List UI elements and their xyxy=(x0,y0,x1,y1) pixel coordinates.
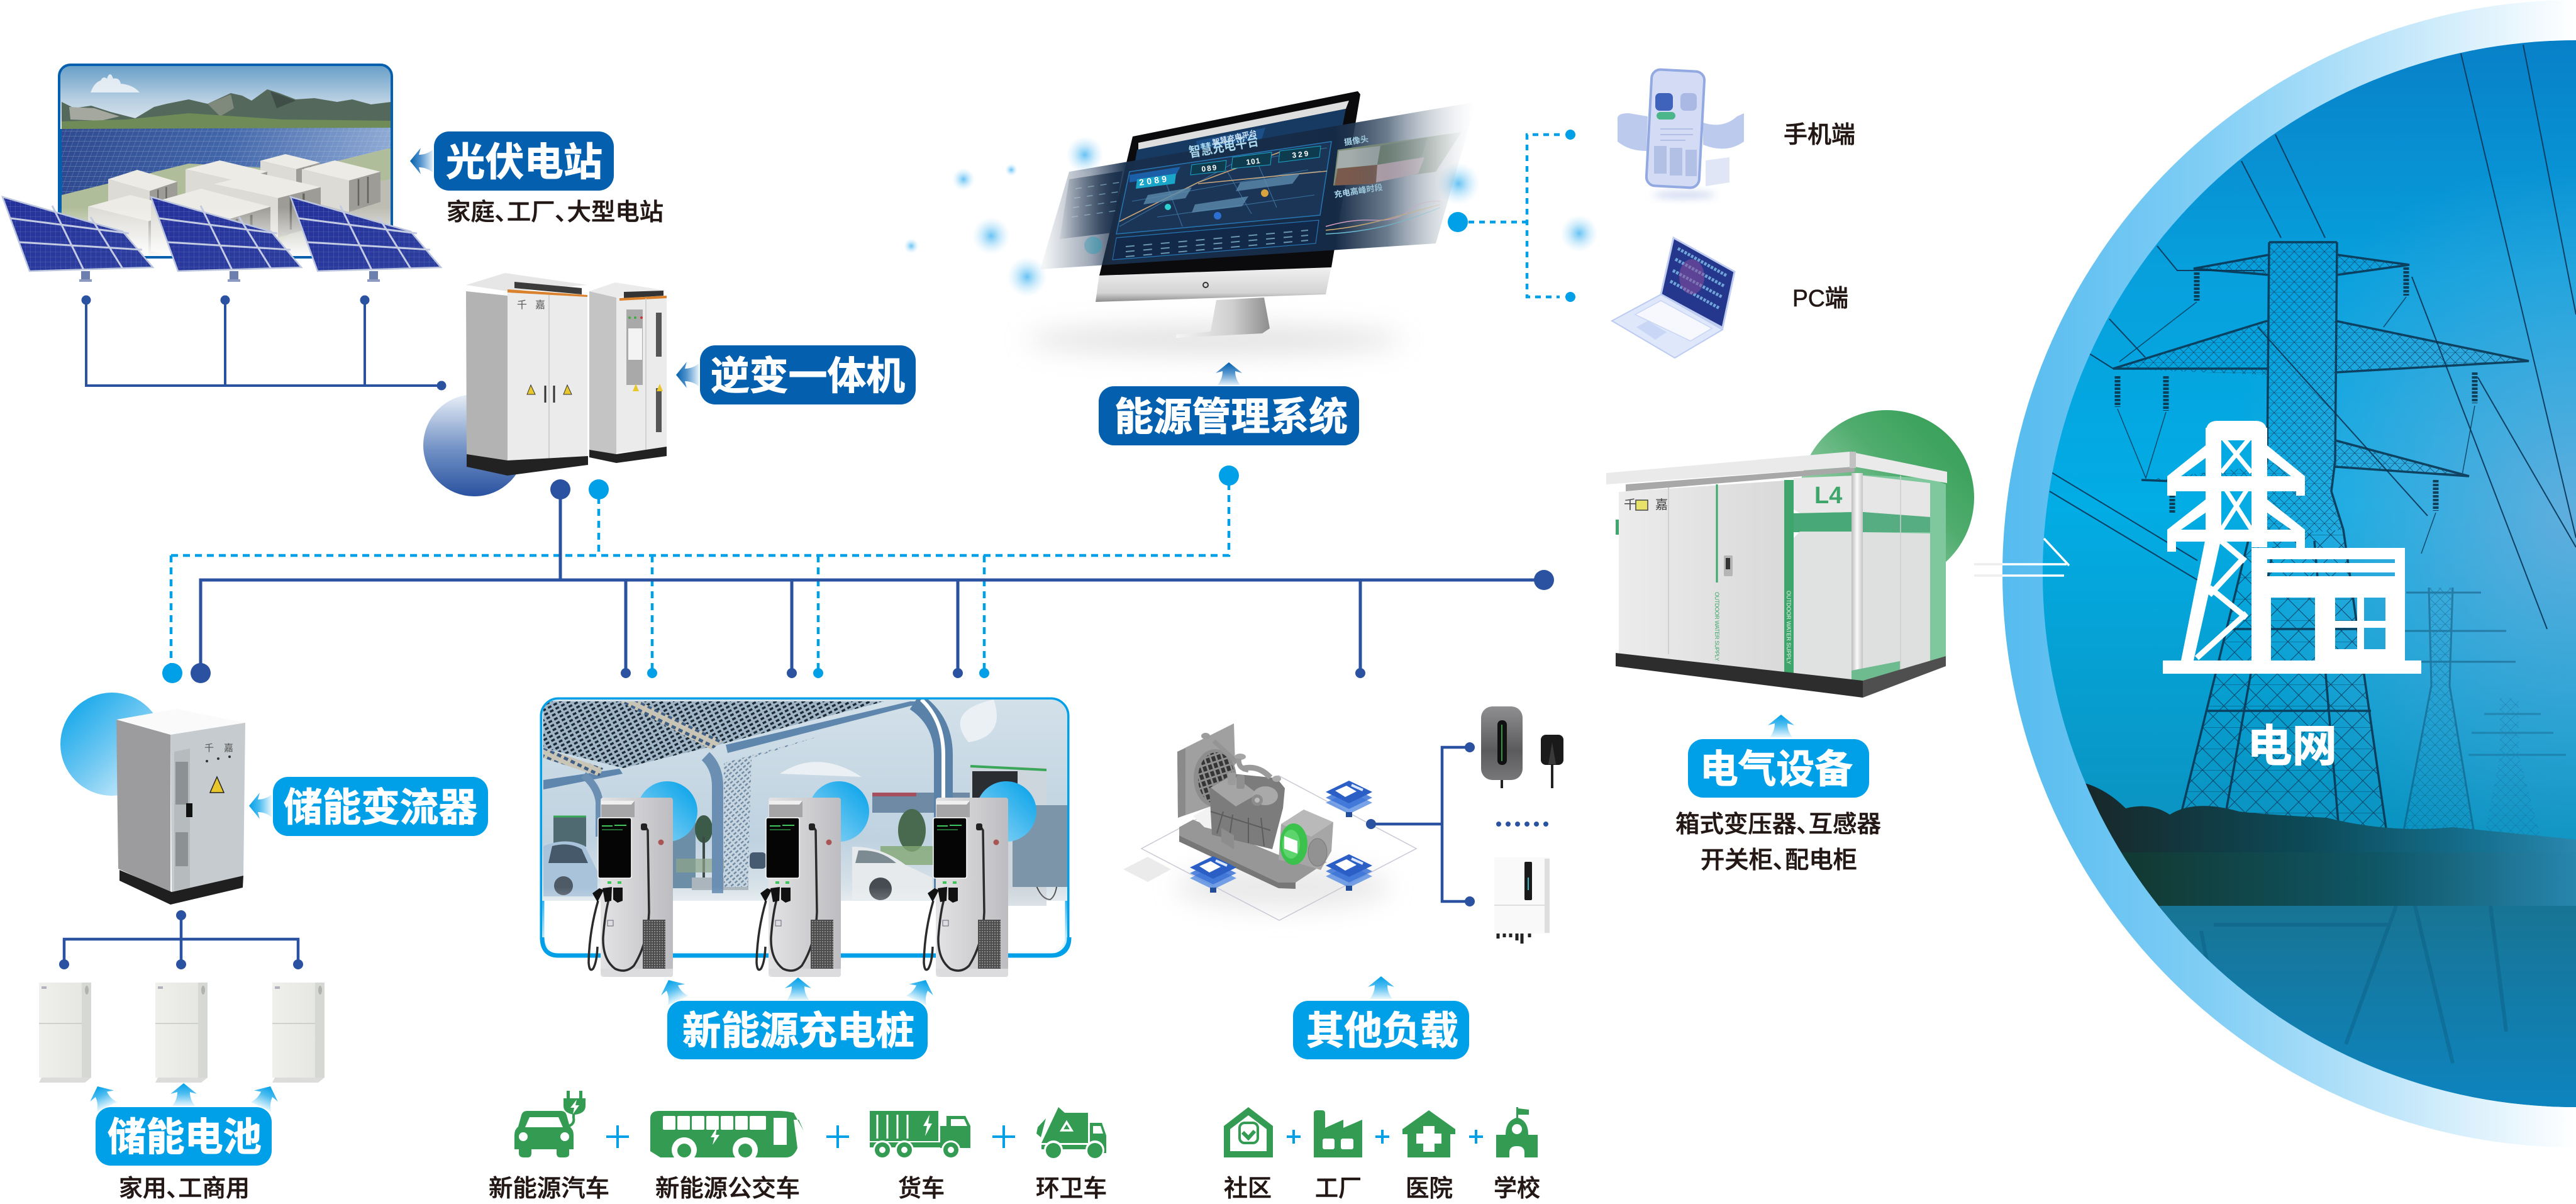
text: converter brand: 千 嘉 xyxy=(204,743,233,754)
icon: white tower and substation xyxy=(2163,421,2421,674)
device: battery 1 xyxy=(39,983,91,1083)
text: dashboard title: 智慧充电平台 xyxy=(1188,133,1260,160)
plus xyxy=(826,1125,849,1148)
label: 电气设备 xyxy=(1688,739,1869,798)
plus xyxy=(1287,1130,1301,1144)
text: brand logo: 千 嘉 xyxy=(1624,498,1668,512)
text: dashboard value 089: 089 xyxy=(1201,163,1217,174)
device: charger 2 xyxy=(757,798,841,977)
grid panel: power tower photo xyxy=(2038,38,2576,1113)
distant towers xyxy=(2403,588,2516,829)
arrow: to other loads xyxy=(1368,976,1394,999)
decorative circle behind inverter xyxy=(423,394,525,496)
text: 环卫车: 环卫车 xyxy=(1036,1176,1107,1202)
text: 学校: 学校 xyxy=(1494,1176,1540,1202)
label: 新能源充电桩 xyxy=(667,1001,928,1059)
icon: data stack upper right xyxy=(1326,781,1372,817)
label: 电气设备: 电气设备 xyxy=(1700,748,1853,791)
text: L4 mark: L4 xyxy=(1814,482,1842,509)
device: battery 2 xyxy=(155,983,208,1083)
label: 光伏电站 xyxy=(434,131,614,191)
radiator xyxy=(1177,723,1235,818)
connector: generator to loads xyxy=(1366,742,1548,906)
device: storage converter cabinet xyxy=(116,709,245,905)
arrow: to inverter xyxy=(676,362,699,388)
text: electrical equipment line 1: 箱式变压器、互感器 xyxy=(1675,811,1881,838)
decorative circle behind charger 1 xyxy=(637,781,697,842)
text: dashboard value 101: 101 xyxy=(1246,156,1261,167)
arrow: charger centre xyxy=(785,978,811,1000)
connector: converter to batteries xyxy=(59,910,303,969)
text: camera heading: 摄像头 xyxy=(1343,134,1369,147)
icon: factory xyxy=(1314,1110,1362,1157)
icon: electric car xyxy=(514,1091,586,1157)
decorative circle behind converter xyxy=(60,693,164,796)
label: 其他负载: 其他负载 xyxy=(1306,1010,1458,1053)
device: wall charger xyxy=(1481,706,1563,788)
text: dashboard value 2089: 2089 xyxy=(1138,174,1167,187)
alternator xyxy=(1279,810,1333,870)
text: dashboard value 329: 329 xyxy=(1292,149,1309,160)
text: 手机端: 手机端 xyxy=(1784,122,1855,148)
label: 储能变流器: 储能变流器 xyxy=(284,786,477,830)
icon: hospital xyxy=(1402,1110,1455,1157)
icon: data stack lower right xyxy=(1326,854,1372,891)
overhead power lines xyxy=(2050,45,2576,629)
device: monitor with dashboard xyxy=(1040,91,1476,338)
connector: main power bus xyxy=(191,479,1554,683)
text: 新能源汽车: 新能源汽车 xyxy=(489,1176,609,1202)
arrow: to transformer xyxy=(1768,715,1794,737)
icon: solar panel 1 xyxy=(3,197,153,282)
label: 能源管理系统: 能源管理系统 xyxy=(1114,396,1348,439)
monitor shadow xyxy=(1026,325,1403,355)
icon: community xyxy=(1224,1107,1273,1157)
text: 社区: 社区 xyxy=(1224,1176,1272,1202)
icon: data stack lower left xyxy=(1190,856,1236,893)
text: 电网: 电网 xyxy=(2247,722,2337,771)
label: 新能源充电桩: 新能源充电桩 xyxy=(682,1010,914,1053)
text: inverter brand: 千 嘉 xyxy=(517,299,545,311)
text: 货车: 货车 xyxy=(898,1176,945,1202)
decorative circle behind charger 2 xyxy=(809,781,869,842)
main lattice tower xyxy=(2113,242,2529,845)
icon: solar panel 3 xyxy=(291,197,441,282)
device: battery 3 xyxy=(272,983,325,1083)
text: solar subtitle: 家庭、工厂、大型电站 xyxy=(447,199,663,226)
arrow: charger left xyxy=(657,974,690,1006)
text: electrical equipment line 2: 开关柜、配电柜 xyxy=(1701,847,1857,874)
text: browser dashboard heading: 智慧充电平台 xyxy=(1211,128,1258,147)
label: 储能变流器 xyxy=(273,777,488,836)
plus xyxy=(1469,1130,1483,1144)
icon: mobile phone xyxy=(1618,69,1744,198)
ground fade xyxy=(542,887,1067,954)
connector: monitor to terminals xyxy=(1448,130,1575,302)
arrow: charger right xyxy=(904,974,938,1006)
glow particles around monitor xyxy=(904,136,1598,297)
background charging unit xyxy=(970,766,1057,906)
label: 其他负载 xyxy=(1293,1001,1469,1059)
text: 医院: 医院 xyxy=(1406,1176,1453,1202)
text: PC端: PC端 xyxy=(1792,286,1848,312)
arrow: to solar station xyxy=(410,148,433,174)
device: charger 3 xyxy=(924,798,1008,977)
arrow: battery centre xyxy=(170,1083,197,1106)
grid panel: outer light ring xyxy=(2002,0,2576,1147)
icon: school xyxy=(1496,1107,1538,1157)
tree line and field xyxy=(2069,780,2576,912)
arrow: to energy management monitor xyxy=(1216,362,1242,385)
icon: solar panel 2 xyxy=(151,197,301,282)
icon: electric bus xyxy=(650,1111,804,1162)
icon: laptop xyxy=(1612,238,1735,358)
icon: sanitation truck xyxy=(1036,1107,1106,1159)
arrow: battery right xyxy=(249,1081,282,1113)
dashboard screen xyxy=(1040,102,1476,269)
label: 储能电池 xyxy=(96,1107,272,1166)
device: charger 1 xyxy=(589,798,673,977)
device: home inverter xyxy=(1494,857,1550,944)
parked car left xyxy=(543,842,597,896)
label: 逆变一体机 xyxy=(700,345,916,404)
device: inverter cabinets xyxy=(466,273,667,476)
arrow: battery left xyxy=(86,1081,119,1113)
device: generator set xyxy=(1123,723,1416,920)
icon: truck xyxy=(870,1111,970,1159)
canopy roof xyxy=(543,701,884,768)
text: 新能源公交车: 新能源公交车 xyxy=(655,1176,800,1202)
plus xyxy=(1375,1130,1389,1144)
text: chart heading: 充电高峰时段 xyxy=(1333,182,1384,199)
label: 能源管理系统 xyxy=(1099,386,1359,445)
panel: charging station scene xyxy=(542,700,1069,956)
plus xyxy=(606,1125,629,1148)
label: 储能电池: 储能电池 xyxy=(108,1116,262,1159)
text: 工厂: 工厂 xyxy=(1315,1176,1362,1202)
decorative circle behind transformer xyxy=(1799,410,1974,585)
device: L4 box transformer xyxy=(1606,452,1947,698)
text: vertical caption left: OUTDOOR WATER SUPPLY xyxy=(1714,592,1720,661)
panel: solar power station photo xyxy=(60,66,391,271)
arrow: to the grid xyxy=(1974,538,2069,576)
connector: dashed communication bus xyxy=(162,465,1239,683)
skid base xyxy=(1179,820,1327,883)
text: battery subtitle: 家用、工商用 xyxy=(119,1176,250,1202)
text: vertical caption right: OUTDOOR WATER SUPPLY xyxy=(1785,591,1792,664)
label: 逆变一体机: 逆变一体机 xyxy=(711,355,905,398)
parked car right xyxy=(852,847,932,900)
engine block xyxy=(1209,774,1285,849)
decorative circle behind charger 3 xyxy=(976,781,1036,842)
connector: solar to inverter xyxy=(82,296,447,390)
water and reflections xyxy=(2158,906,2576,1107)
plus xyxy=(992,1125,1015,1148)
arrow: to converter xyxy=(249,793,272,819)
label: 光伏电站: 光伏电站 xyxy=(446,141,602,184)
